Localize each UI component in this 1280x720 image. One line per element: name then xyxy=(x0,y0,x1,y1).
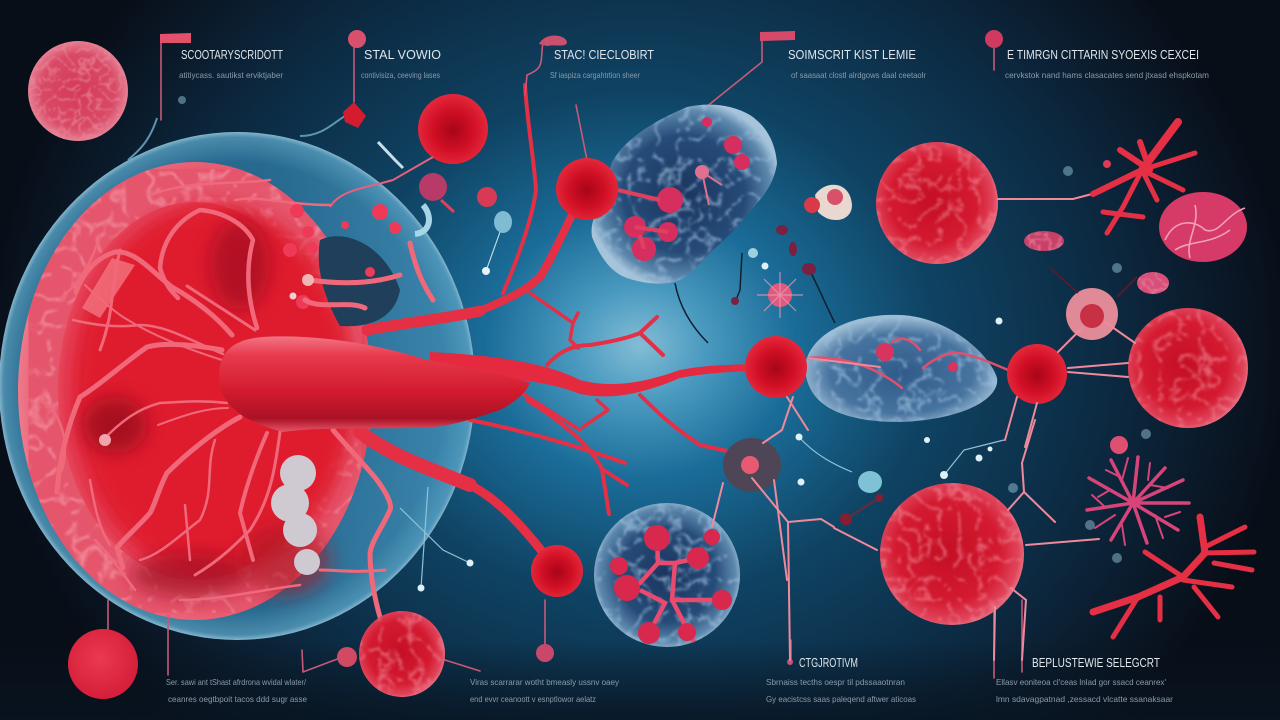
caption 2: contivisiza, ceeving lases xyxy=(361,70,440,80)
blob upper inclusions xyxy=(624,117,750,261)
caption 3: Sf iaspiza cargahtrtion sheer xyxy=(550,70,640,80)
caption 3 xyxy=(550,48,654,80)
bottom stem cell xyxy=(536,644,554,662)
upper vessel to cell xyxy=(367,311,480,330)
caption 9: lmn sdavagpatnad ,zessacd vlcatte ssanaksaar xyxy=(996,694,1173,704)
caption 2 xyxy=(361,48,441,80)
organ veins xyxy=(40,180,390,617)
caption 5: cervkstok nand hams clasacates send jtxasd ehspkotam xyxy=(1005,70,1209,80)
lower thick vessel xyxy=(360,432,470,485)
caption 4: SOIMSCRIT KIST LEMIE xyxy=(788,48,916,62)
coral upper right xyxy=(1093,122,1195,233)
caption 9: Ellasv eoniteoa cl'ceas lnlad gor ssacd ceanrex' xyxy=(996,677,1166,687)
inner cavity xyxy=(75,205,355,597)
caption 7 xyxy=(470,677,620,704)
top captions xyxy=(179,48,1209,80)
small cell upper xyxy=(477,187,497,207)
cell upper centre-left xyxy=(418,94,488,164)
wrinkled outer rim of organ xyxy=(38,182,352,600)
caption 5: E TIMRGN CITTARIN SYOEXIS CEXCEI xyxy=(1007,48,1199,62)
caption 8 xyxy=(766,656,916,704)
caption 9 xyxy=(996,656,1173,704)
bottom captions xyxy=(166,656,1173,704)
caption 1: atitiycass. sautikst erviktjaber xyxy=(179,70,283,80)
dark cavity upper right xyxy=(319,236,400,326)
caption 6: Ser. sawi ant tShast afrdrona wvidal wlater/ xyxy=(166,677,307,687)
callout stems xyxy=(108,36,1022,678)
coral red lower right xyxy=(1093,517,1254,637)
blob middle inclusions xyxy=(876,343,894,361)
bottom left smooth sphere xyxy=(68,629,138,699)
caption 8: CTGJROTIVM xyxy=(799,656,858,670)
caption 4 xyxy=(788,48,926,80)
cell vessel bottom xyxy=(531,545,583,597)
blue cell with red network xyxy=(594,503,740,647)
large textured red cells xyxy=(359,142,1248,697)
cell vessel middle xyxy=(745,336,807,398)
large red organ sphere xyxy=(18,162,433,620)
blue blob middle xyxy=(805,315,1008,422)
network lines xyxy=(627,538,722,642)
caption 8: Gy eacistcss saas paleqend aftwer aticoas xyxy=(766,694,916,704)
main red vessel xyxy=(219,85,748,555)
top-left textured cell xyxy=(28,41,128,141)
caption 6: ceanres oegtbpoit tacos ddd sugr asse xyxy=(168,694,307,704)
blue blob upper xyxy=(592,105,777,284)
pale blue thread lines xyxy=(400,437,1004,588)
cell right junction xyxy=(1007,344,1067,404)
callout markers xyxy=(160,30,1003,665)
dark cell lower centre xyxy=(723,438,781,492)
caption 3: STAC! CIECLOBIRT xyxy=(554,48,654,62)
pale pink cell right xyxy=(1066,288,1118,340)
red cells xyxy=(68,94,1067,699)
pink blob upper right xyxy=(1159,192,1247,262)
bottom small cell xyxy=(337,647,357,667)
caption 2: STAL VOWIO xyxy=(364,48,441,62)
sphere halo xyxy=(0,112,475,640)
vein to right xyxy=(430,352,748,396)
caption 1: SCOOTARYSCRIDOTT xyxy=(181,48,283,62)
small cell near upper vessel xyxy=(419,173,447,201)
organ right red cluster xyxy=(283,204,401,309)
cell at vessel top xyxy=(556,158,618,220)
caption 5 xyxy=(1005,48,1209,80)
caption 9: BEPLUSTEWIE SELEGCRT xyxy=(1032,656,1160,670)
caption 7: Viras scarrarar wotht bmeasly ussnv oaey xyxy=(470,677,620,687)
connecting lines right xyxy=(712,194,1135,660)
small floating elements xyxy=(178,96,1169,592)
fat vessel body xyxy=(219,336,530,432)
caption 6 xyxy=(166,677,307,704)
upper branch xyxy=(530,293,578,348)
coral pink lower right xyxy=(1087,436,1189,545)
caption 8: Sbrnaiss tecths oespr til pdssaaotnran xyxy=(766,677,905,687)
caption 4: of saasaat clostl alrdgows daal ceetaolr xyxy=(791,70,926,80)
white bead chain xyxy=(271,455,320,575)
caption 7: end evvr ceanoott v esnptlowor aelatz xyxy=(470,694,596,704)
caption 1 xyxy=(179,48,283,80)
